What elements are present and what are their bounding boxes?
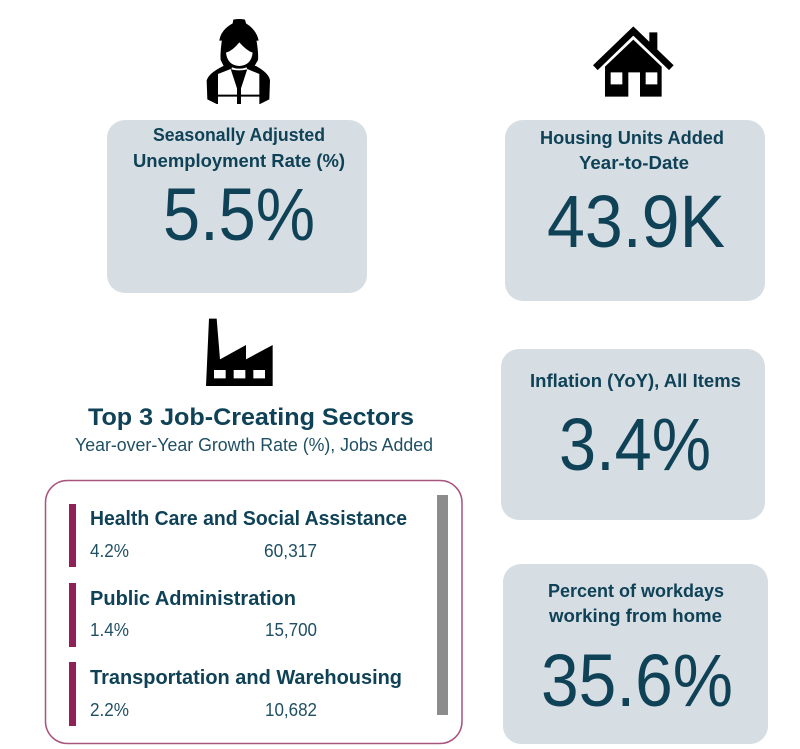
- value: 3.4%: 3.4%: [559, 403, 711, 486]
- panel: inflation: [501, 349, 765, 520]
- sector: public administration: 15,700: [265, 620, 317, 640]
- panel heading: unemployment: Seasonally Adjusted: [153, 125, 325, 145]
- icon: construction worker: [207, 19, 270, 105]
- panel heading: work from home: [548, 581, 724, 626]
- panel: sector list: [46, 480, 462, 744]
- panel heading: housing: [540, 128, 724, 173]
- panel heading: housing: Year-to-Date: [579, 153, 689, 173]
- sector: health care: 4.2%: [90, 541, 129, 561]
- sector: health care: Health Care and Social Assistance: [90, 508, 407, 530]
- sector: public administration: 1.4%: [90, 620, 129, 640]
- sector: transportation: 2.2%: [90, 700, 129, 720]
- title: Top 3 Job-Creating Sectors: [88, 404, 414, 431]
- icon: factory: [206, 319, 273, 386]
- value: 35.6%: 35.6%: [541, 639, 733, 722]
- sector: transportation: [69, 662, 402, 726]
- heading: top job-creating sectors: [75, 404, 433, 455]
- sector: transportation: Transportation and Warehousing: [90, 667, 402, 689]
- panel heading: inflation: Inflation (YoY), All Items: [530, 371, 741, 391]
- sector: health care: [69, 504, 407, 567]
- value: 5.5%: 5.5%: [163, 173, 315, 256]
- sector: public administration: [69, 583, 317, 647]
- panel heading: unemployment: [133, 125, 345, 171]
- panel heading: work from home: working from home: [548, 606, 722, 626]
- panel heading: unemployment: Unemployment Rate (%): [133, 151, 345, 171]
- panel heading: work from home: Percent of workdays: [548, 581, 724, 601]
- icon: house: [595, 31, 671, 97]
- subtitle: Year-over-Year Growth Rate (%), Jobs Added: [75, 435, 433, 455]
- panel: housing units: [505, 120, 765, 301]
- panel: unemployment rate: [107, 120, 367, 293]
- value: 43.9K: 43.9K: [547, 180, 725, 263]
- panel heading: housing: Housing Units Added: [540, 128, 724, 148]
- sector: health care: 60,317: [264, 541, 317, 561]
- panel: work from home: [503, 564, 768, 744]
- sector: public administration: Public Administration: [90, 588, 296, 610]
- sector: transportation: 10,682: [265, 700, 317, 720]
- scrollbar: [437, 495, 448, 715]
